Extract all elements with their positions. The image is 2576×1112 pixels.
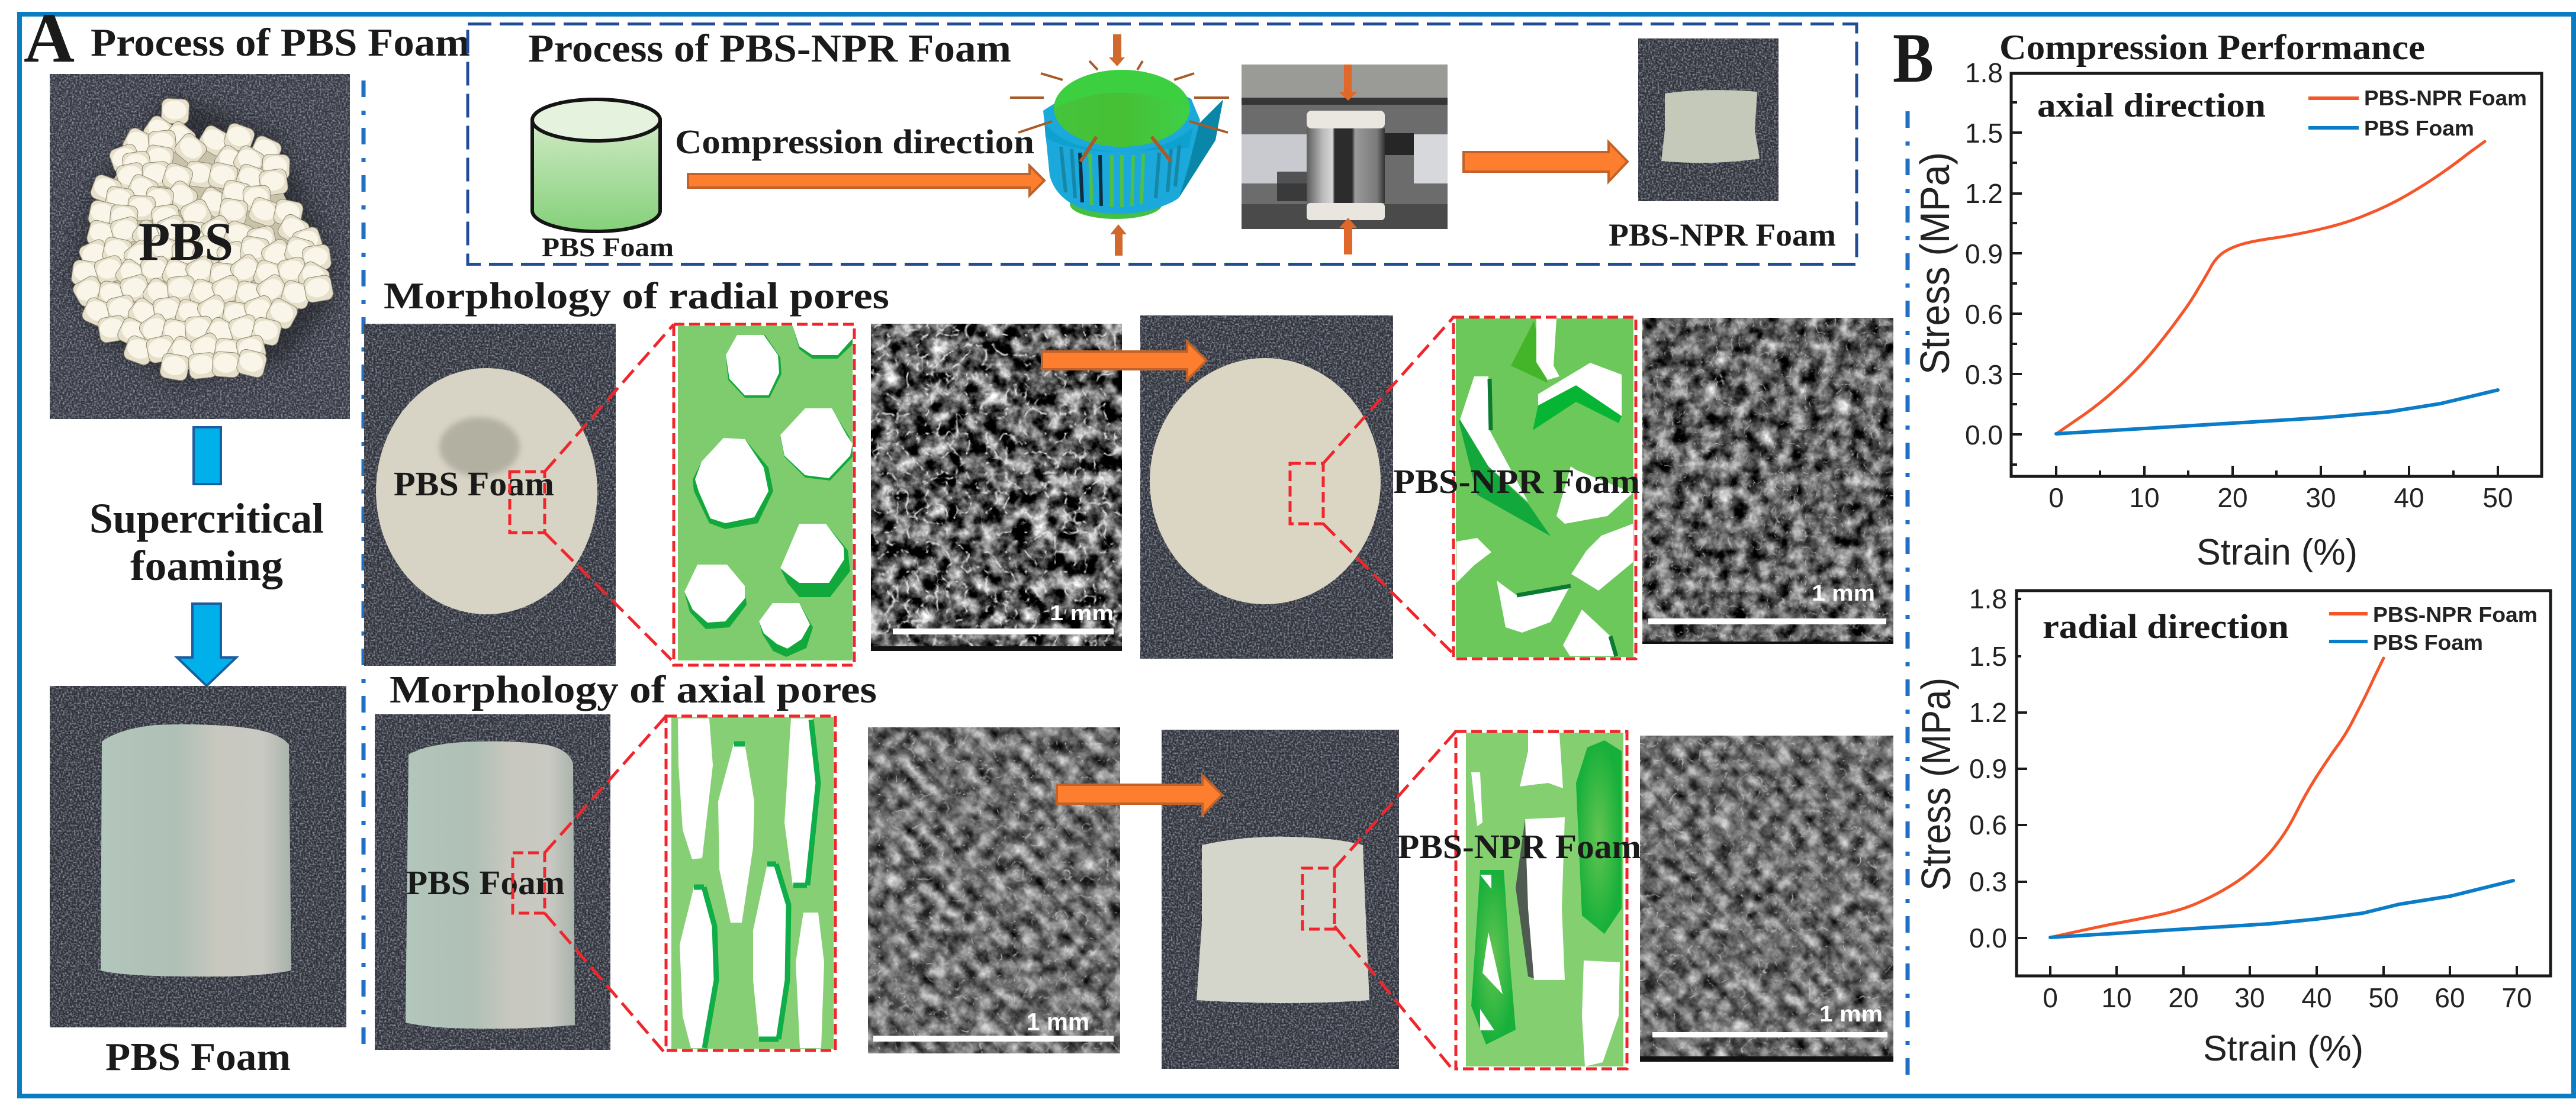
x axis numbers bbox=[2048, 482, 2513, 513]
x axis numbers: 60 bbox=[2435, 982, 2465, 1013]
chart label: axial direction bbox=[2037, 87, 2266, 124]
x axis numbers: 20 bbox=[2217, 482, 2248, 513]
PBS curve bbox=[2050, 881, 2513, 937]
y axis numbers: 1.5 bbox=[1965, 118, 2003, 149]
PBS-NPR curve bbox=[2050, 658, 2384, 937]
legend: PBS Foam bbox=[2364, 116, 2474, 140]
SEM: radial NPR foam bbox=[1642, 318, 1893, 644]
axial NPR foam photo bbox=[1162, 730, 1399, 1069]
arrow in fixture top bbox=[1339, 65, 1358, 101]
radial NPR foam photo bbox=[1140, 315, 1393, 659]
icon: compression mold bbox=[1010, 34, 1229, 256]
divider A left bbox=[361, 80, 366, 1049]
y axis numbers bbox=[1965, 57, 2003, 450]
x axis numbers: 30 bbox=[2305, 482, 2336, 513]
y axis numbers: 1.8 bbox=[1969, 584, 2007, 614]
panel B bbox=[1893, 18, 2551, 1068]
chart label: radial direction bbox=[2043, 607, 2289, 646]
blue arrow stem bbox=[194, 427, 221, 484]
x axis numbers: 40 bbox=[2301, 982, 2332, 1013]
panel letter A: A bbox=[24, 0, 75, 77]
legend: PBS-NPR Foam bbox=[2373, 602, 2538, 627]
arrow: to NPR foam bbox=[1464, 142, 1628, 182]
x axis numbers: 40 bbox=[2394, 482, 2424, 513]
label: Compression direction: Compression direction bbox=[675, 123, 1034, 161]
caption: PBS Foam: PBS Foam bbox=[105, 1035, 291, 1079]
arrow: axial compression bbox=[1057, 775, 1222, 815]
blue arrow down bbox=[177, 604, 236, 686]
PBS-NPR curve bbox=[2056, 141, 2485, 434]
y axis numbers: 1.2 bbox=[1965, 178, 2003, 209]
arrow in fixture bottom bbox=[1339, 218, 1357, 254]
y axis numbers: 1.8 bbox=[1965, 57, 2003, 88]
y axis numbers: 1.5 bbox=[1969, 641, 2007, 672]
scale label: 1 mm bbox=[1027, 1008, 1089, 1036]
y axis numbers: 0.0 bbox=[1965, 420, 2003, 450]
x axis title: Strain (%) bbox=[2196, 532, 2358, 573]
SEM: axial NPR foam bbox=[1640, 736, 1893, 1062]
photo: PBS-NPR foam bbox=[1638, 38, 1779, 201]
legend: PBS Foam bbox=[2373, 630, 2483, 655]
panel A bbox=[24, 0, 1893, 1079]
radial PBS zoom callout bbox=[510, 324, 854, 665]
x axis numbers: 10 bbox=[2129, 482, 2160, 513]
y axis numbers: 0.9 bbox=[1969, 753, 2007, 784]
chart ticks bbox=[2011, 102, 2498, 476]
y axis numbers bbox=[1969, 584, 2007, 953]
bottom force arrow bbox=[1110, 224, 1127, 256]
divider B left bbox=[1905, 111, 1910, 1082]
SEM: axial PBS foam bbox=[868, 727, 1120, 1053]
x axis numbers: 50 bbox=[2368, 982, 2399, 1013]
axial PBS foam photo bbox=[375, 714, 610, 1050]
label: PBS-NPR Foam: PBS-NPR Foam bbox=[1393, 462, 1640, 501]
y axis title: Stress (MPa) bbox=[1913, 678, 1959, 891]
y axis numbers: 0.6 bbox=[1969, 810, 2007, 840]
legend: PBS-NPR Foam bbox=[2364, 86, 2527, 110]
x axis numbers: 30 bbox=[2234, 982, 2265, 1013]
panel letter B: B bbox=[1893, 18, 1934, 97]
x axis numbers: 10 bbox=[2101, 982, 2132, 1013]
x axis numbers: 20 bbox=[2168, 982, 2199, 1013]
label: PBS-NPR Foam: PBS-NPR Foam bbox=[1398, 827, 1641, 866]
legend bbox=[2329, 602, 2538, 655]
axial PBS zoom callout bbox=[513, 716, 835, 1052]
PBS curve bbox=[2056, 390, 2498, 434]
radial force arrows bbox=[1010, 61, 1229, 162]
label: PBS: PBS bbox=[139, 211, 233, 272]
scale bar bbox=[873, 1036, 1114, 1042]
heading: Compression Performance: Compression Performance bbox=[1999, 28, 2425, 67]
PBS pellets photo bbox=[50, 74, 350, 419]
x axis numbers: 50 bbox=[2482, 482, 2513, 513]
scale bar bbox=[893, 628, 1114, 634]
mold slots bbox=[1061, 145, 1179, 207]
y axis numbers: 0.9 bbox=[1965, 238, 2003, 269]
heading: Morphology of axial pores: Morphology of axial pores bbox=[390, 668, 877, 711]
photo: compression fixture bbox=[1242, 65, 1448, 254]
scale label: 1 mm bbox=[1812, 581, 1875, 606]
radial PBS foam photo bbox=[364, 324, 616, 666]
x axis title: Strain (%) bbox=[2203, 1029, 2363, 1068]
x axis numbers: 0 bbox=[2043, 982, 2058, 1013]
SEM: radial PBS foam bbox=[871, 324, 1122, 651]
heading: Process of PBS Foam: Process of PBS Foam bbox=[91, 21, 470, 65]
y axis numbers: 0.3 bbox=[1965, 359, 2003, 390]
heading: Process of PBS-NPR Foam: Process of PBS-NPR Foam bbox=[528, 27, 1011, 70]
PBS Foam cylinder photo bbox=[50, 686, 346, 1027]
label: Supercritical foaming: Supercritical bbox=[89, 495, 324, 542]
scale label: 1 mm bbox=[1050, 601, 1114, 625]
caption: PBS-NPR Foam: PBS-NPR Foam bbox=[1609, 217, 1836, 253]
top force arrow bbox=[1109, 34, 1125, 66]
heading: Morphology of radial pores: Morphology of radial pores bbox=[384, 275, 889, 317]
y axis numbers: 0.6 bbox=[1965, 299, 2003, 330]
x axis numbers: 70 bbox=[2501, 982, 2532, 1013]
y axis title: Stress (MPa) bbox=[1912, 152, 1958, 375]
radial NPR zoom callout bbox=[1290, 317, 1640, 659]
legend bbox=[2308, 86, 2527, 140]
scale bar bbox=[1652, 1032, 1887, 1037]
scale label: 1 mm bbox=[1819, 1002, 1883, 1027]
panel: Process of PBS-NPR Foam bbox=[468, 24, 1857, 264]
x axis numbers: 0 bbox=[2048, 482, 2064, 513]
label: PBS Foam: PBS Foam bbox=[406, 863, 565, 902]
y axis numbers: 1.2 bbox=[1969, 697, 2007, 728]
chart ticks bbox=[2017, 599, 2517, 976]
chart: radial direction bbox=[1913, 584, 2551, 1068]
cylinder label: PBS Foam bbox=[542, 232, 674, 262]
chart: axial direction bbox=[1912, 57, 2542, 573]
x axis numbers bbox=[2043, 982, 2532, 1013]
label: PBS Foam: PBS Foam bbox=[394, 465, 554, 503]
icon: green cylinder bbox=[532, 99, 660, 231]
axial NPR zoom callout bbox=[1303, 731, 1641, 1071]
scale bar bbox=[1648, 618, 1886, 624]
y axis numbers: 0.3 bbox=[1969, 866, 2007, 897]
arrow: to mold bbox=[688, 166, 1044, 195]
pore wall shading bbox=[694, 720, 818, 1048]
label: Supercritical foaming bbox=[89, 495, 324, 589]
label: Supercritical foaming: foaming bbox=[130, 542, 283, 589]
y axis numbers: 0.0 bbox=[1969, 923, 2007, 953]
arrow: radial compression bbox=[1042, 341, 1207, 380]
